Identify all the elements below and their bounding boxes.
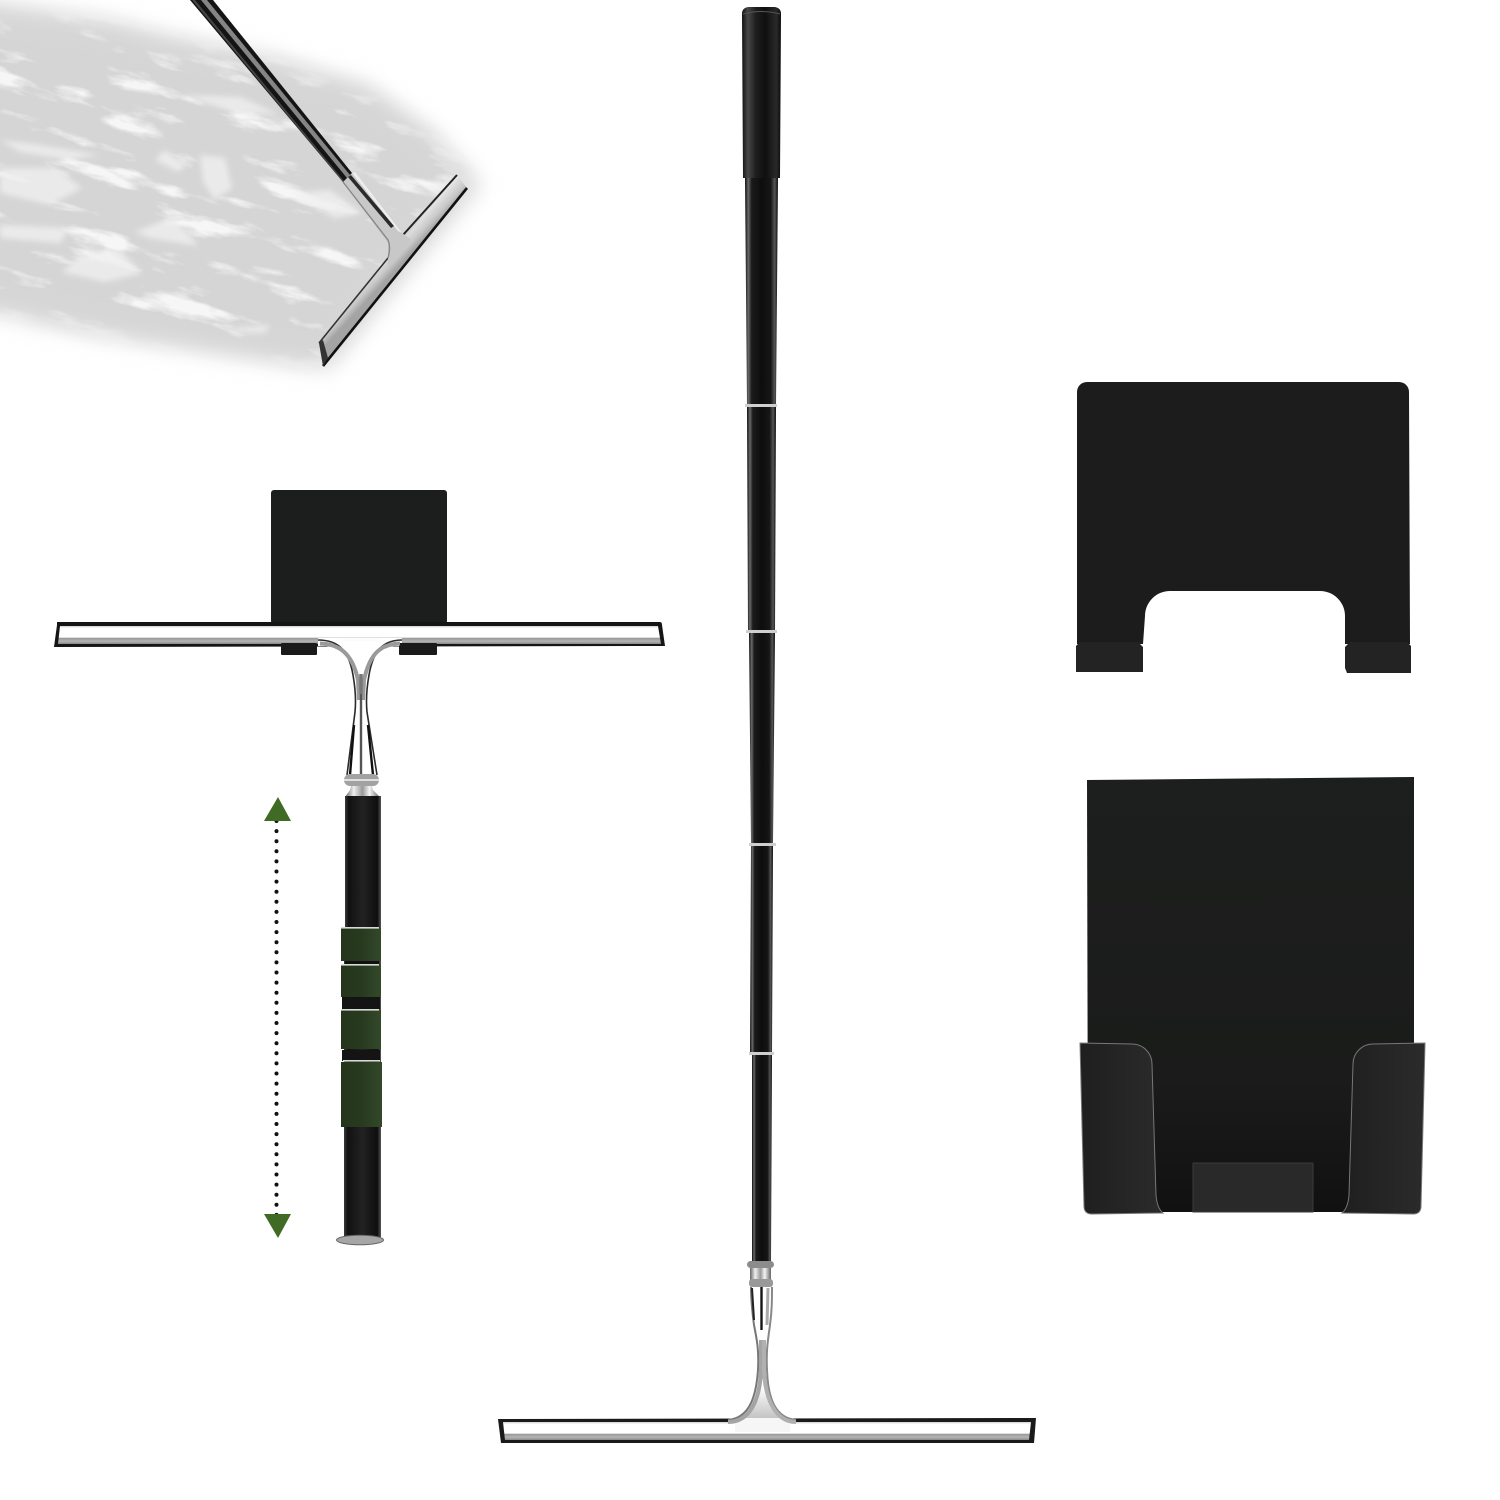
T-blade: [319, 175, 467, 366]
right hook tab: [1345, 642, 1411, 673]
wall bracket: [271, 490, 447, 624]
chrome T neck: [318, 638, 402, 775]
pole section 3: [747, 407, 776, 630]
green highlighted sections: [341, 927, 382, 1127]
pole section 6: [752, 1055, 772, 1262]
wall bracket, side pocket view (bottom right): [1080, 777, 1425, 1214]
length adjustment arrow: [264, 797, 291, 1238]
black handle: [190, 0, 352, 182]
telescopic black handle: [336, 796, 384, 1245]
end cap: [336, 1235, 384, 1245]
extended telescopic squeegee (centre): [498, 7, 1036, 1443]
chrome T neck: [728, 1287, 796, 1422]
arrowhead down: [264, 1214, 291, 1238]
wiped marble surface: [0, 0, 484, 376]
marble wall panel with top-left squeegee: [0, 0, 484, 376]
ring 2: [746, 630, 777, 633]
blade: [498, 1418, 1036, 1443]
pole cap section: [742, 7, 781, 178]
clip right: [399, 643, 437, 655]
pole section 4: [749, 633, 775, 843]
bracket plate with notch: [1077, 382, 1410, 644]
right wing: [1342, 1043, 1425, 1214]
clip left: [281, 643, 317, 655]
ring 1: [745, 404, 777, 407]
rubber blade: [54, 622, 665, 647]
left hook tab: [1076, 642, 1143, 672]
wall bracket, front view (top right): [1076, 382, 1411, 673]
dotted line: [274, 821, 278, 1216]
ferrule: [747, 1261, 774, 1287]
ring 3: [749, 843, 776, 846]
centre stop block: [1193, 1163, 1313, 1212]
back plate: [1087, 777, 1414, 1212]
top-left squeegee: [190, 0, 467, 366]
ferrule: [344, 774, 380, 797]
ring 4: [749, 1052, 774, 1055]
pole section 2: [745, 178, 778, 404]
pole section 5: [750, 846, 773, 1053]
squeegee with mounted bracket (left): [54, 490, 665, 1245]
arrowhead up: [264, 797, 291, 821]
left wing: [1080, 1043, 1163, 1214]
chrome neck: [343, 172, 412, 268]
